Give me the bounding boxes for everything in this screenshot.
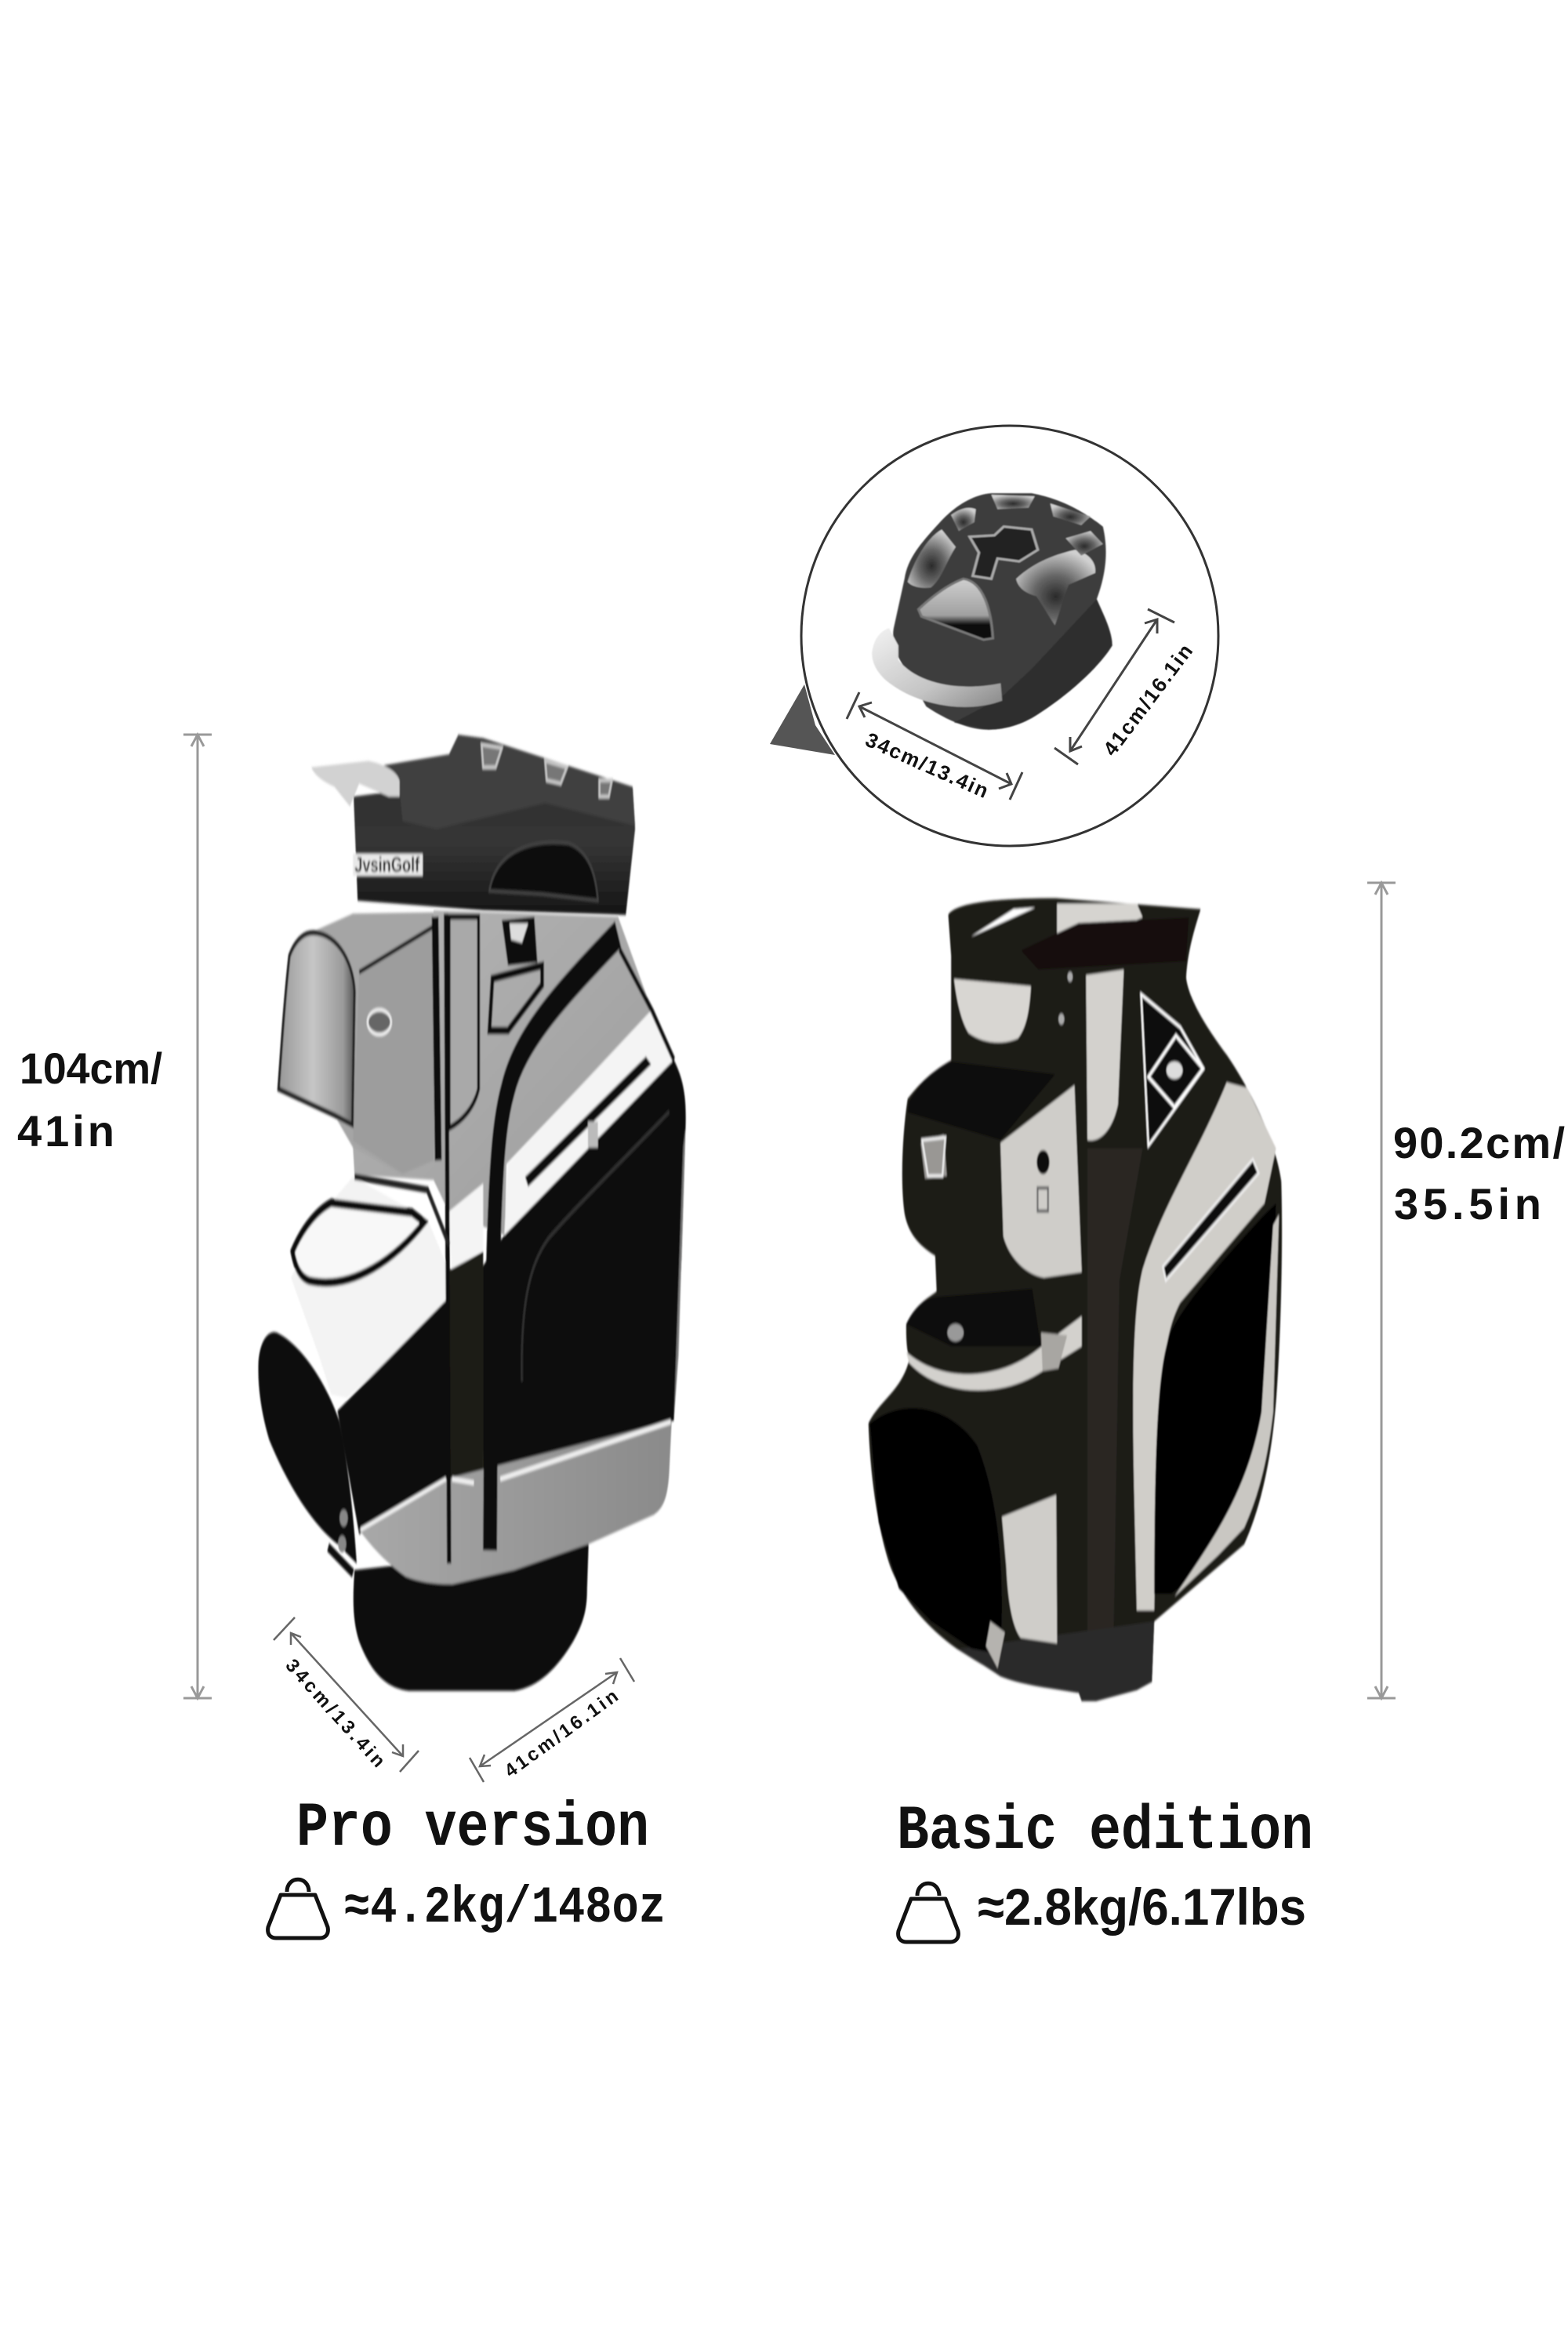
callout tail xyxy=(770,684,835,755)
diamond emblem xyxy=(1142,994,1203,1145)
weight text: pro: ≈4.2kg/148oz xyxy=(343,1878,666,1937)
basic edition golf bag illustration xyxy=(869,898,1282,1701)
zip slit xyxy=(1163,1160,1258,1280)
zipper pull xyxy=(588,1122,598,1148)
black front panel xyxy=(481,1060,686,1483)
gray upper body xyxy=(353,910,652,1236)
weight icon: pro xyxy=(268,1879,328,1938)
handle opening xyxy=(971,908,1035,937)
bag head illustration xyxy=(872,493,1112,730)
main zipper band xyxy=(490,935,618,1551)
base dimension: pro 41cm xyxy=(470,1658,634,1782)
height label: pro version: 41in xyxy=(17,1106,114,1156)
zipper pulls xyxy=(922,1138,946,1176)
black lower left panel xyxy=(337,1301,449,1534)
pocket slit xyxy=(525,1057,652,1186)
heading: basic edition: Basic edition xyxy=(897,1796,1313,1867)
height label: basic edition: 35.5in xyxy=(1394,1179,1541,1229)
gray lower band xyxy=(359,1421,672,1584)
base xyxy=(354,1544,589,1691)
weight text: basic: ≈2.8kg/6.17lbs xyxy=(978,1878,1306,1936)
pro version golf bag illustration xyxy=(258,735,686,1691)
black lower pocket flap xyxy=(258,1332,357,1563)
side gray pocket xyxy=(278,913,434,1175)
brand label xyxy=(353,854,423,876)
height label: pro version: 104cm/ xyxy=(20,1044,162,1093)
collar xyxy=(354,735,635,915)
bottom pocket xyxy=(870,1408,1002,1654)
label: pro 34cm/13.4in: 34cm/13.4in xyxy=(281,1655,389,1772)
light handle xyxy=(311,760,400,806)
badge logo xyxy=(510,924,528,943)
center strip and lighter base xyxy=(1087,1149,1142,1632)
white lower panel xyxy=(291,1177,449,1398)
upper pocket xyxy=(908,1062,1055,1140)
lower pocket xyxy=(906,1289,1041,1346)
dimension: 34cm width xyxy=(847,692,1022,800)
circle outline xyxy=(801,426,1218,846)
pocket outline on front xyxy=(522,1112,670,1381)
base dimension: pro 34cm xyxy=(274,1617,419,1772)
label: 34cm/13.4in: 34cm/13.4in xyxy=(862,728,992,803)
black side pocket xyxy=(1154,1203,1276,1594)
vertical light panel xyxy=(1086,970,1123,1141)
heading: pro version: Pro version xyxy=(296,1793,649,1864)
top light inserts xyxy=(1057,904,1142,945)
curved light side panel xyxy=(1133,1083,1276,1610)
white flap xyxy=(292,1203,424,1283)
top rim xyxy=(372,735,635,829)
dimension: 41cm depth xyxy=(1054,609,1174,764)
height label: basic edition: 90.2cm/ xyxy=(1393,1118,1565,1167)
collar pocket xyxy=(489,843,598,901)
inner gray panel and strap xyxy=(449,916,478,1128)
height dimension: pro version xyxy=(183,735,212,1698)
label: pro 41cm/16.1in: 41cm/16.1in xyxy=(501,1686,622,1782)
pro version golf bag illustration: JvsinGolf xyxy=(354,854,419,877)
label: 41cm/16.1in: 41cm/16.1in xyxy=(1098,640,1197,760)
dark center strip xyxy=(448,1251,483,1483)
detail circle: top of bag xyxy=(770,426,1218,846)
height dimension: basic edition xyxy=(1367,883,1396,1698)
white stripe xyxy=(504,1011,673,1236)
silhouette xyxy=(869,898,1282,1701)
upper light window xyxy=(954,979,1031,1043)
weight icon: basic xyxy=(898,1883,958,1942)
